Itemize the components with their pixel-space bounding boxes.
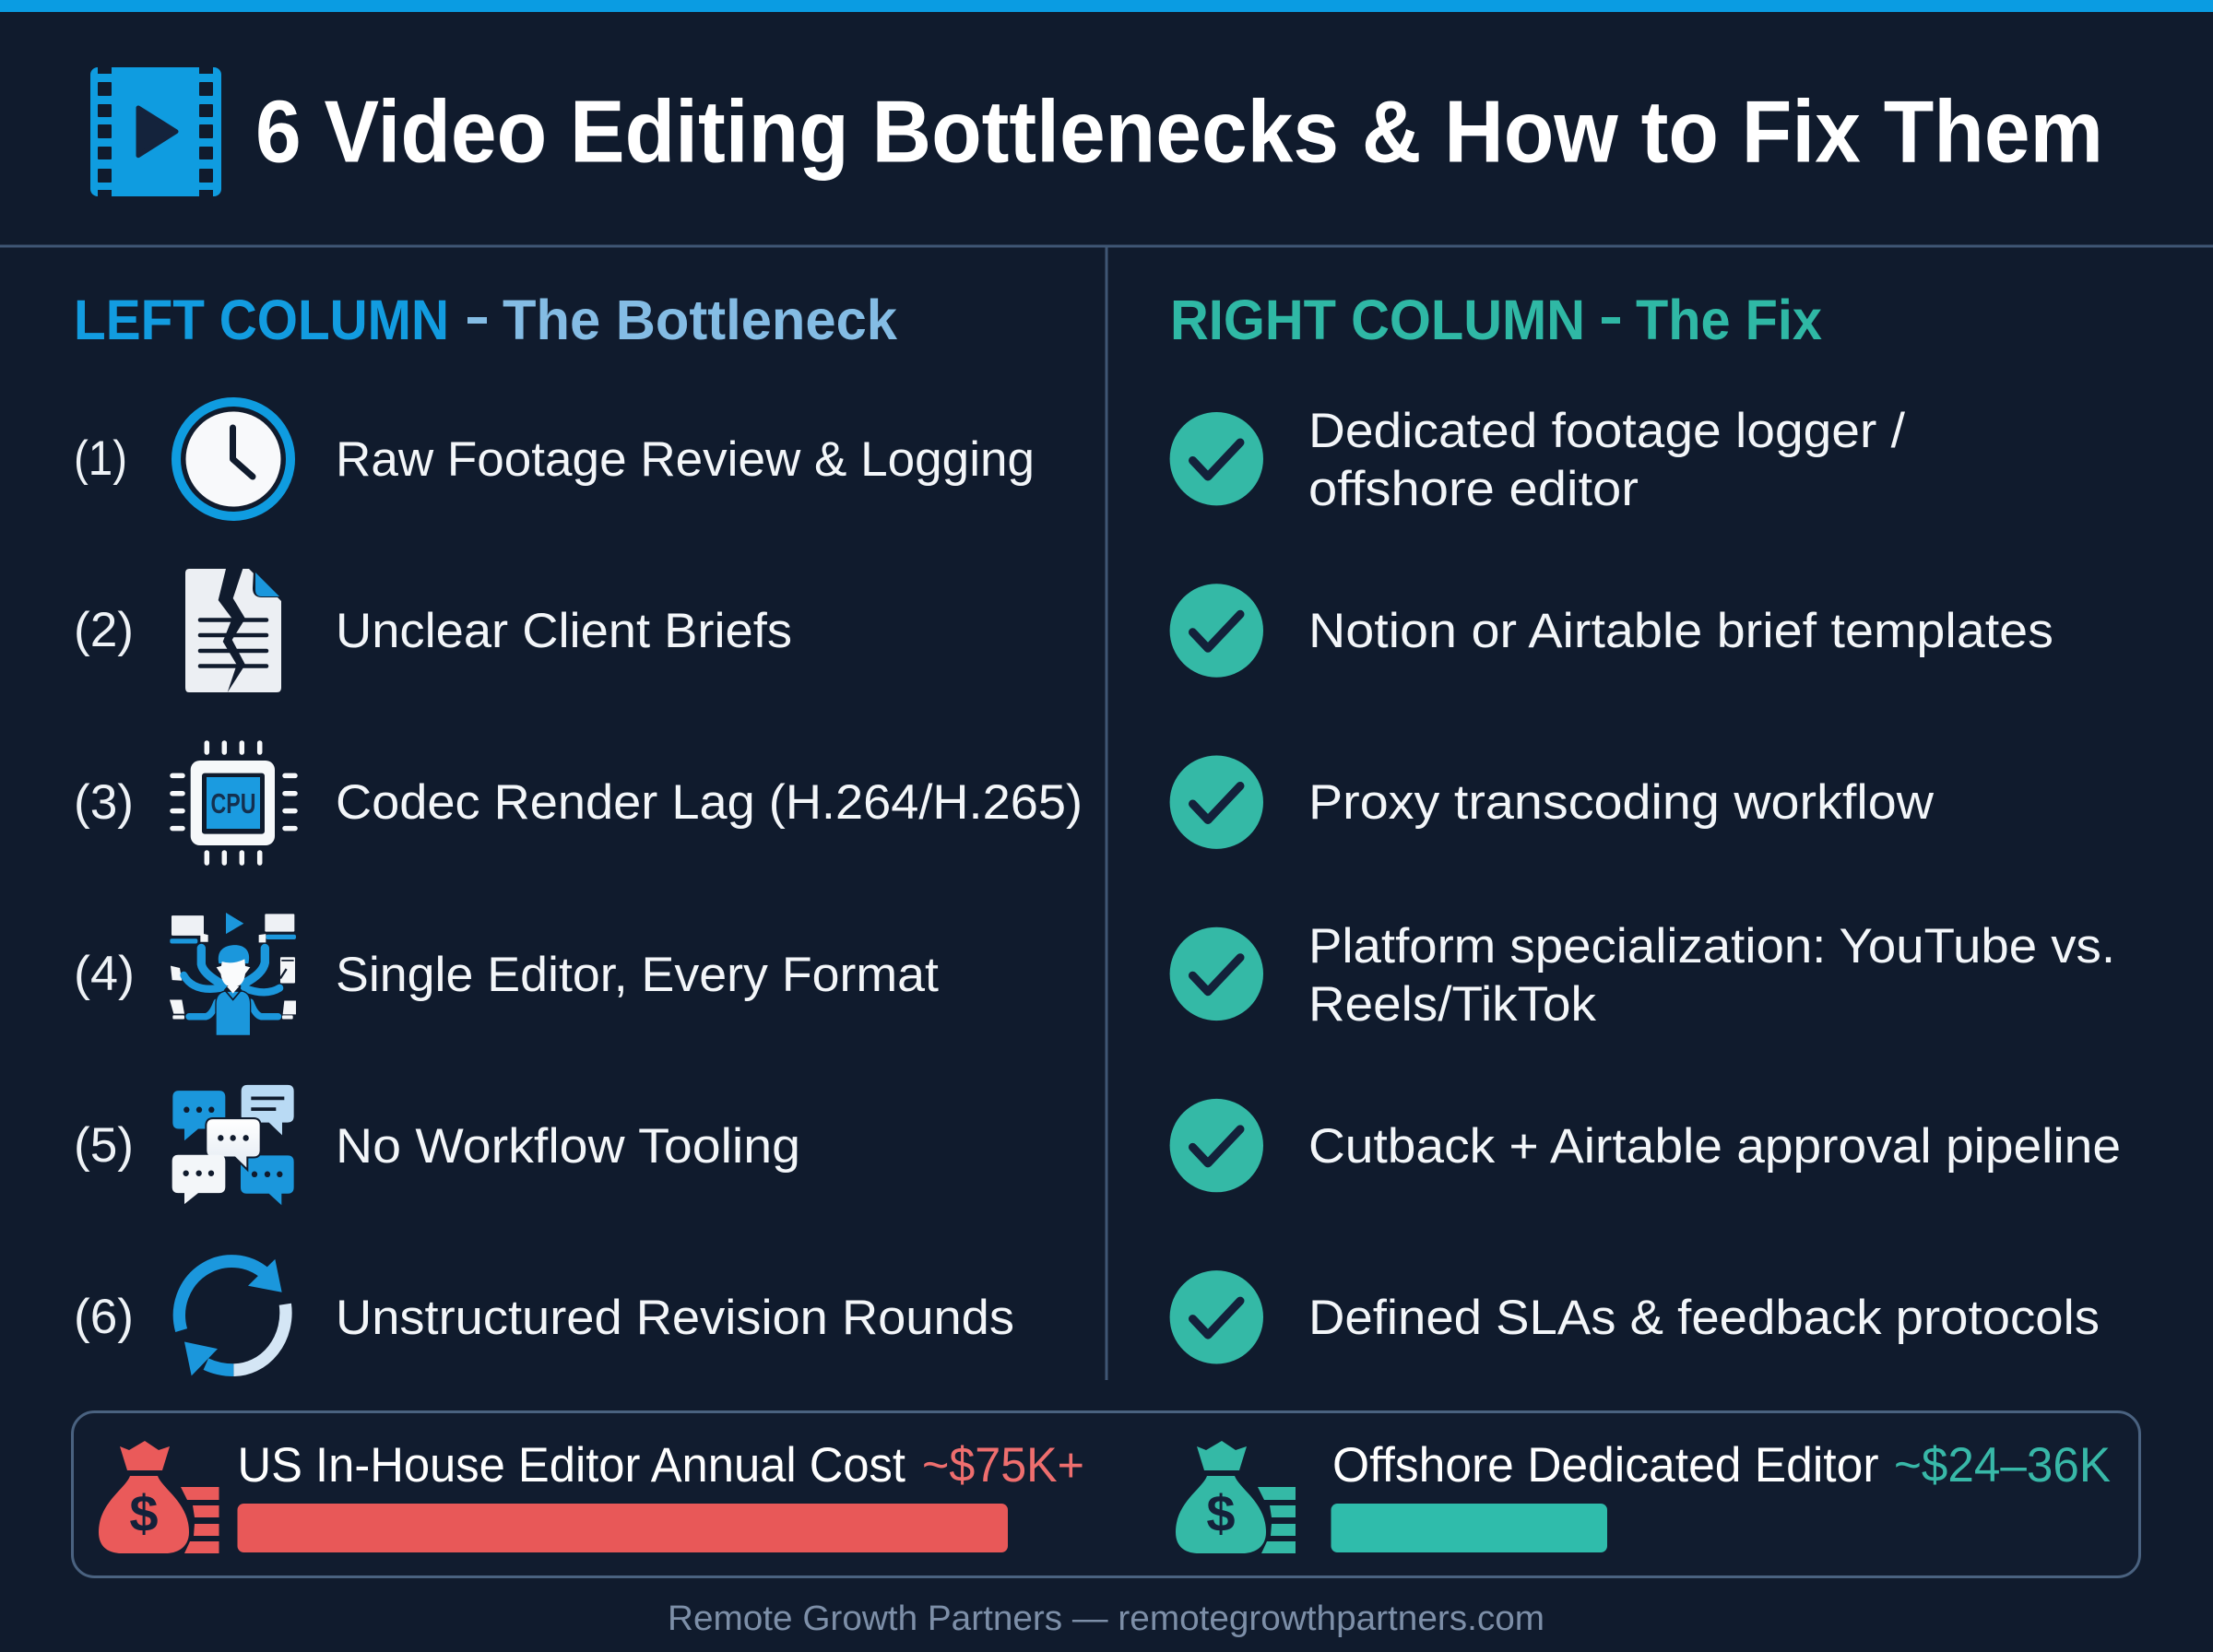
panel: bottleneck 2 [74,569,792,692]
panel: bottleneck 4 [74,913,939,1035]
footer credit: Remote Growth Partners — remotegrowthpartners.com [668,1599,1544,1638]
panel: fix 4 [1170,919,2115,1032]
heading: right column: RIGHT COLUMN [1170,289,1585,351]
icon: check [1170,412,1263,505]
icon: scattered chat bubbles [172,1085,294,1205]
panel: bottleneck 5 [74,1085,800,1205]
label: US editor cost: ~$75K+ [922,1438,1084,1493]
heading: right column [1170,289,1822,351]
panel: bottleneck 4: (4) [74,947,135,1001]
top accent bar [0,0,2213,12]
label: Dedicated footage logger / [1308,404,1905,458]
panel: fix 6 [1170,1270,2100,1364]
panel: cost comparison [72,1412,2139,1576]
label: Cutback + Airtable approval pipeline [1308,1119,2121,1174]
panel: fix 4: Reels/TikTok [1308,977,1597,1032]
bar: US editor cost [238,1504,1008,1552]
heading: right column: The Fix [1636,289,1822,351]
icon: check [1170,584,1263,678]
label: Platform specialization: YouTube vs. [1308,919,2115,974]
panel: fix 5 [1170,1099,2121,1192]
icon: red money bag [99,1441,219,1553]
icon: clock [176,402,290,516]
label: Defined SLAs & feedback protocols [1308,1291,2100,1345]
icon: film strip with play button [90,67,221,196]
label: No Workflow Tooling [336,1119,800,1174]
icon: check [1170,1270,1263,1364]
panel: bottleneck 1: (1) [74,431,127,486]
label: Unclear Client Briefs [336,604,792,658]
title: 6 Video Editing Bottlenecks & How to Fix Them [255,83,2103,181]
header [90,67,2103,196]
panel: fix 3 [1170,756,1935,849]
label: offshore editor cost: Offshore Dedicated Editor [1332,1438,1879,1493]
label: Raw Footage Review & Logging [336,432,1035,487]
icon: red money bag: $ [129,1484,159,1542]
label: Unstructured Revision Rounds [336,1291,1014,1345]
icon: check [1170,927,1263,1021]
panel: bottleneck 5: (5) [74,1118,134,1173]
icon: torn document [185,569,281,692]
icon: teal money bag: $ [1206,1484,1236,1542]
label: US editor cost: US In-House Editor Annual Cost [238,1438,905,1493]
icon: check [1170,1099,1263,1192]
panel: bottleneck 3 [74,743,1083,863]
label: Proxy transcoding workflow [1308,775,1935,830]
label: Codec Render Lag (H.264/H.265) [336,775,1083,830]
panel: bottleneck 6: (6) [74,1290,134,1344]
label: offshore editor cost: ~$24–36K [1894,1438,2111,1493]
panel: fix 1 [1170,404,1905,516]
label: Notion or Airtable brief templates [1308,604,2053,658]
panel: bottleneck 6 [74,1259,1014,1375]
panel: bottleneck 2: (2) [74,603,134,657]
icon: check [1170,756,1263,849]
heading: left column [74,289,897,351]
icon: multitasking editor [170,913,296,1035]
panel: bottleneck 3: (3) [74,775,134,830]
heading: left column: The Bottleneck [503,289,897,351]
icon: CPU chip: CPU [210,787,256,820]
panel: bottleneck 1 [74,402,1035,516]
label: Single Editor, Every Format [336,948,939,1002]
icon: revision loop arrows [179,1259,286,1375]
panel: fix 2 [1170,584,2053,678]
icon: teal money bag [1176,1441,1296,1553]
panel: fix 1: offshore editor [1308,462,1639,516]
icon: CPU chip [172,743,295,863]
heading: left column: LEFT COLUMN [74,289,449,351]
bar: offshore editor cost [1331,1504,1607,1552]
